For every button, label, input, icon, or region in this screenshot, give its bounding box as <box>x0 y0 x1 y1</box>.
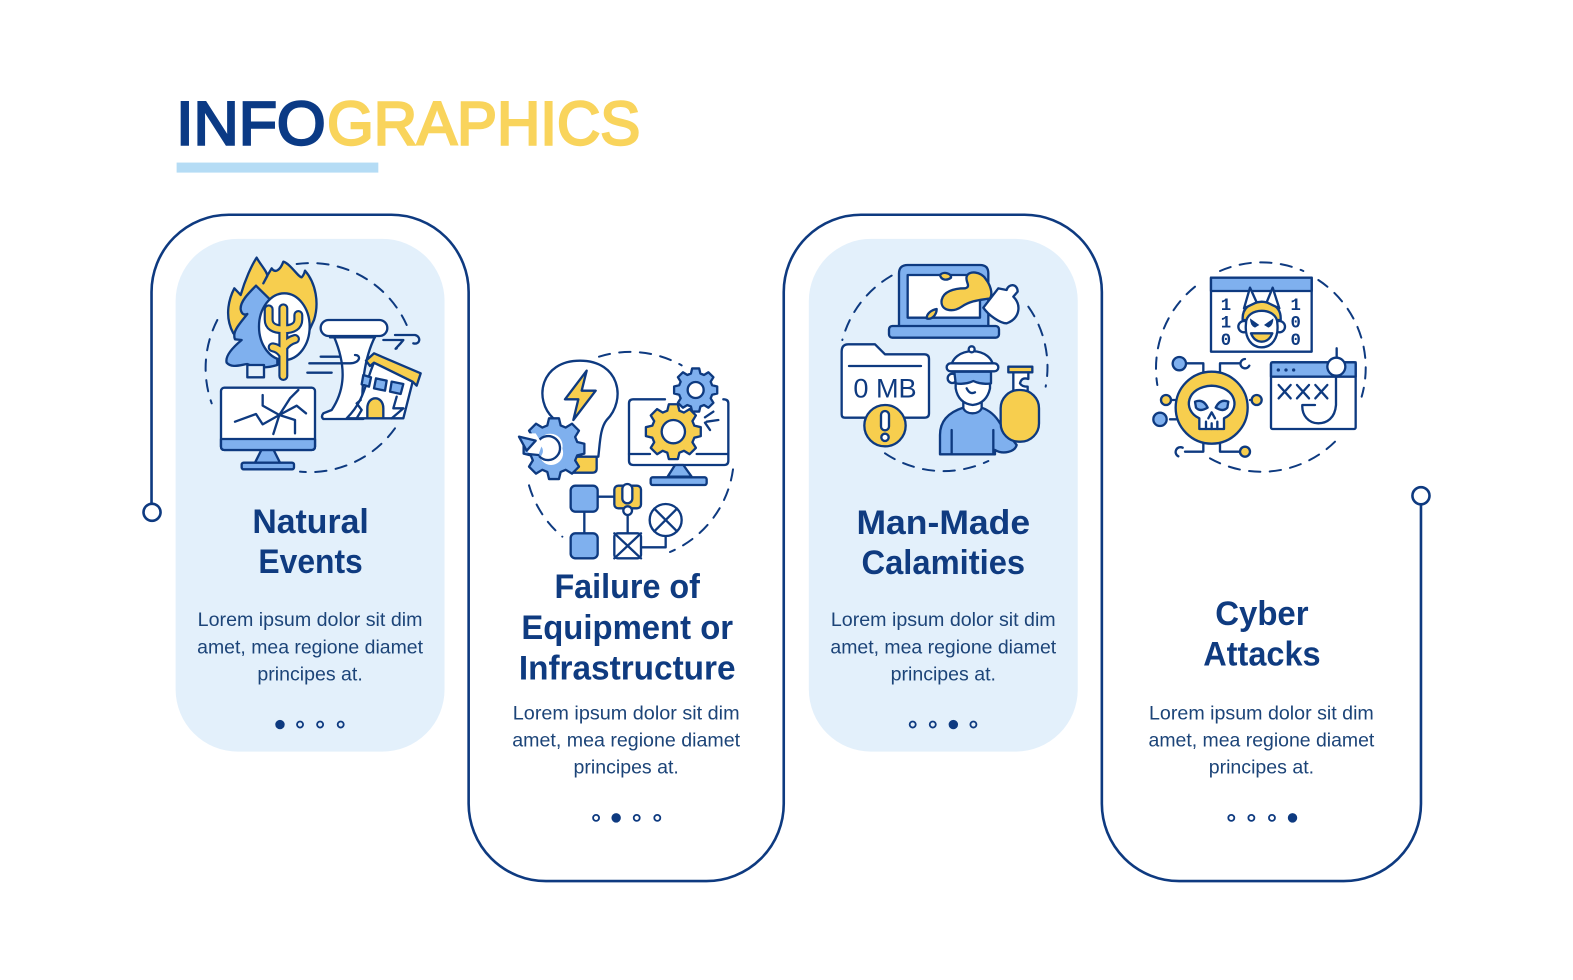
heading: Failure of Equipment or Infrastructure <box>519 568 736 687</box>
tree crown <box>259 293 310 360</box>
body text column 2 <box>512 704 741 779</box>
phishing window <box>1271 348 1356 429</box>
heading: Natural Events <box>252 503 369 581</box>
pagination dots column 1 <box>276 721 344 728</box>
lightning bolt <box>565 371 596 420</box>
pagination dots column 2 <box>593 814 660 822</box>
icon: cyber attacks <box>1153 262 1366 472</box>
heading: Natural Events: Events <box>258 543 363 581</box>
body text column 1: principes at. <box>257 664 363 685</box>
body text column 3: amet, mea regione diamet <box>830 637 1057 658</box>
heading: Cyber Attacks: Cyber <box>1215 595 1309 633</box>
dashed circle <box>842 276 1047 471</box>
network nodes <box>1153 357 1262 457</box>
body text column 4: Lorem ipsum dolor sit dim <box>1149 704 1374 725</box>
body text column 1 <box>197 610 424 685</box>
body text column 2: Lorem ipsum dolor sit dim <box>513 704 740 725</box>
code window with devil face: 1 <box>1290 297 1301 316</box>
body text column 4: principes at. <box>1209 758 1314 779</box>
panel: light background column 3 <box>809 239 1078 752</box>
flames <box>228 258 316 350</box>
body text column 3 <box>830 610 1057 685</box>
light bulb <box>542 361 618 457</box>
monitor <box>629 399 728 485</box>
empty folder <box>842 344 929 418</box>
title: INFOGRAPHICS <box>176 90 640 158</box>
heading: Man-Made Calamities <box>856 504 1030 582</box>
pagination dots column 3 <box>910 721 976 728</box>
heading: Man-Made Calamities: Calamities <box>862 544 1025 582</box>
pagination dots column 4 <box>1228 814 1296 822</box>
code window with devil face: 0 <box>1290 332 1301 351</box>
body text column 3: Lorem ipsum dolor sit dim <box>831 610 1056 631</box>
title: INFOGRAPHICS: INFO <box>176 90 326 158</box>
wind lines <box>307 335 419 373</box>
skull badge <box>1176 372 1248 444</box>
icon: man-made calamities <box>842 265 1047 471</box>
0 MB label: 0 MB <box>853 374 917 404</box>
laptop <box>889 265 999 338</box>
warning sign <box>864 405 906 446</box>
cactus-shaped branches <box>269 308 298 376</box>
body text column 3: principes at. <box>891 664 996 685</box>
body text column 1: Lorem ipsum dolor sit dim <box>198 610 422 631</box>
spilled liquid <box>927 272 991 319</box>
flowchart <box>571 484 682 558</box>
damaged house <box>347 353 421 418</box>
code window with devil face: 0 <box>1290 315 1301 334</box>
pine trunk <box>247 365 264 377</box>
small blue gear <box>674 368 717 412</box>
body text column 2: principes at. <box>574 758 679 779</box>
code window with devil face: 0 <box>1221 332 1231 351</box>
body text column 1: amet, mea regione diamet <box>197 637 424 658</box>
heading: Failure of Equipment or Infrastructure: Failure of <box>554 568 701 606</box>
worker <box>940 346 1017 454</box>
cracked monitor <box>221 388 315 469</box>
dashed circle <box>1156 262 1366 472</box>
title: INFOGRAPHICS: GRAPHICS <box>327 90 640 158</box>
icon: natural events <box>206 258 421 472</box>
heading: Man-Made Calamities: Man-Made <box>856 504 1030 542</box>
heading: Cyber Attacks: Attacks <box>1203 635 1321 673</box>
serpentine outline connecting the four columns <box>144 215 1429 881</box>
body text column 2: amet, mea regione diamet <box>512 731 741 752</box>
body text column 4 <box>1149 704 1375 779</box>
body text column 4: amet, mea regione diamet <box>1149 731 1375 752</box>
heading: Failure of Equipment or Infrastructure: Equipment or <box>521 609 733 647</box>
yellow bottle <box>1001 367 1039 442</box>
white jug <box>983 285 1018 323</box>
heading: Natural Events: Natural <box>252 503 369 541</box>
icon: equipment failure <box>515 352 733 558</box>
title underline <box>177 163 378 173</box>
heading: Cyber Attacks <box>1203 595 1321 673</box>
bulb socket <box>572 457 597 473</box>
dashed circle <box>529 352 733 552</box>
code window with devil face <box>1211 278 1312 352</box>
code window with devil face: 1 <box>1221 297 1231 316</box>
pine tree <box>226 286 277 367</box>
code window with devil face: 1 <box>1221 315 1231 334</box>
tornado <box>321 320 387 419</box>
yellow gear <box>646 404 701 459</box>
panel: light background column 1 <box>176 239 445 752</box>
dashed circle <box>206 263 407 472</box>
heading: Failure of Equipment or Infrastructure: Infrastructure <box>519 649 736 687</box>
broken blue gear <box>515 418 584 479</box>
